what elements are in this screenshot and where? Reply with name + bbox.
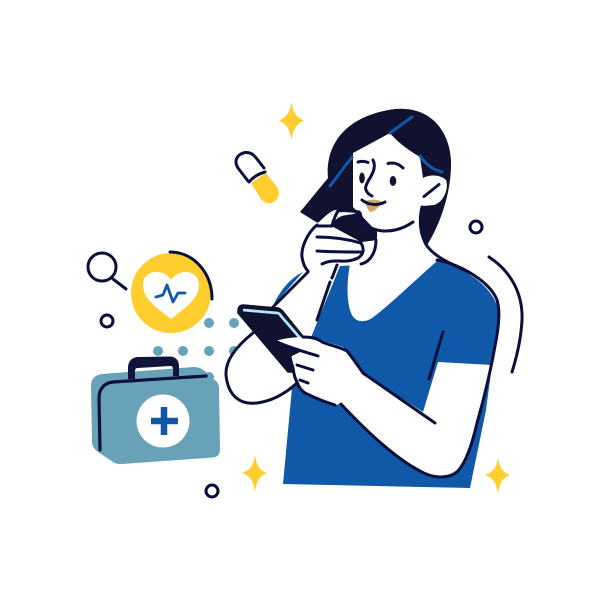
neck right xyxy=(420,207,470,273)
small ring bottom xyxy=(206,485,218,497)
icon: magnifying glass xyxy=(88,253,126,289)
icon: pill capsule xyxy=(236,152,279,203)
woman figure xyxy=(226,109,499,488)
left upper arm xyxy=(273,272,308,307)
small ring right xyxy=(470,221,482,233)
jawline xyxy=(360,213,413,231)
phone xyxy=(238,305,306,372)
mouth line xyxy=(362,200,385,204)
elbow loop xyxy=(226,333,297,403)
shirt xyxy=(283,261,499,488)
neckline skin xyxy=(348,240,437,321)
icon: first aid kit xyxy=(91,356,220,464)
nose xyxy=(366,160,374,196)
forearm top line xyxy=(363,373,435,423)
holding hand xyxy=(275,337,363,405)
ear detail xyxy=(424,184,439,196)
eyes xyxy=(359,172,365,184)
small ring left xyxy=(101,315,113,327)
icon: sparkle bottom left xyxy=(242,455,267,492)
hair highlights xyxy=(330,117,442,186)
hair behind chin xyxy=(332,213,377,242)
icon: sparkle bottom right xyxy=(485,457,510,494)
hand at chin xyxy=(302,210,376,278)
icon: heart with pulse xyxy=(131,252,212,333)
forearm and sleeve opening xyxy=(275,337,492,476)
hair xyxy=(300,109,451,247)
shoulder sliver xyxy=(273,272,303,306)
icon: sparkle top xyxy=(279,102,304,140)
chest dashes xyxy=(317,267,335,320)
sleeve seam xyxy=(429,332,443,379)
brows xyxy=(358,161,403,168)
lips xyxy=(365,200,382,212)
decorative arc right xyxy=(489,257,522,372)
teal dots xyxy=(153,318,239,382)
arm outline xyxy=(340,260,499,477)
face and neck xyxy=(330,117,470,273)
